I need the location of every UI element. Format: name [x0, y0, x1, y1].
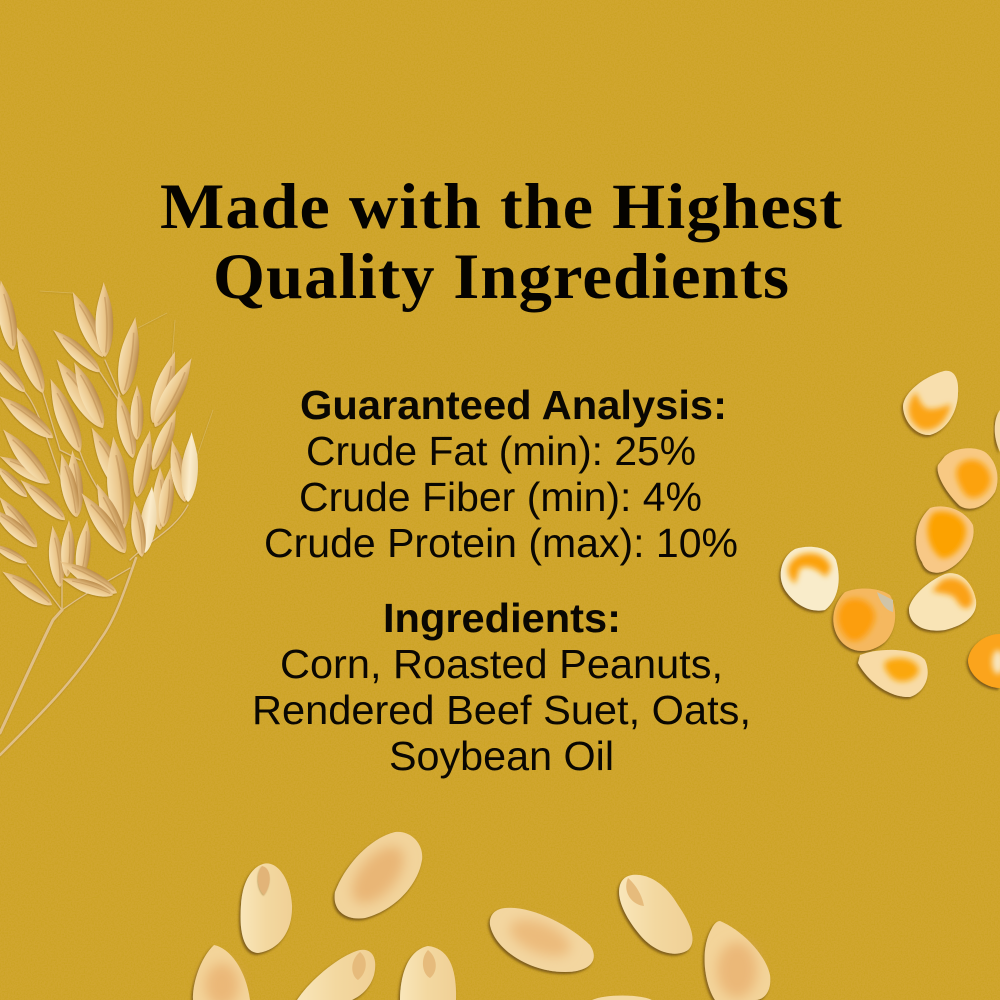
title: Quality Ingredients	[213, 241, 790, 313]
corn kernel 4	[781, 547, 839, 611]
ingredients text block	[252, 595, 751, 779]
corn kernel 5	[833, 588, 895, 651]
peanut 6	[193, 945, 250, 1000]
corn kernel 6	[909, 573, 976, 631]
peanut 4	[619, 875, 693, 954]
peanut 3	[490, 908, 594, 972]
peanut 5	[705, 921, 770, 1000]
icon: oat sprig	[0, 279, 213, 755]
title: Made with the Highest	[160, 171, 843, 243]
corn kernel 2	[938, 448, 998, 509]
peanut 2	[335, 832, 422, 918]
corn kernel 3	[916, 506, 974, 573]
peanut 1	[241, 863, 292, 953]
icon: peanuts	[193, 832, 770, 1000]
corn kernel 1	[903, 371, 958, 435]
ingredients text block: Ingredients:	[383, 595, 621, 641]
guaranteed analysis text block: Guaranteed Analysis:	[300, 382, 727, 428]
peanut 7	[297, 950, 375, 1000]
icon: corn kernels	[781, 371, 1000, 697]
guaranteed analysis text block: Crude Fat (min): 25%	[306, 428, 696, 474]
peanut 8	[400, 946, 456, 1000]
guaranteed analysis text block: Crude Protein (max): 10%	[264, 520, 738, 566]
corn kernel 8	[968, 634, 1000, 688]
corn kernel 9	[995, 410, 1000, 452]
ingredients text block: Rendered Beef Suet, Oats,	[252, 687, 751, 733]
ingredients text block: Corn, Roasted Peanuts,	[280, 641, 723, 687]
guaranteed analysis text block	[264, 382, 738, 566]
ingredients text block: Soybean Oil	[389, 733, 614, 779]
title	[160, 171, 843, 313]
peanut 9	[592, 996, 652, 1000]
corn kernel 7	[858, 650, 928, 697]
guaranteed analysis text block: Crude Fiber (min): 4%	[299, 474, 702, 520]
